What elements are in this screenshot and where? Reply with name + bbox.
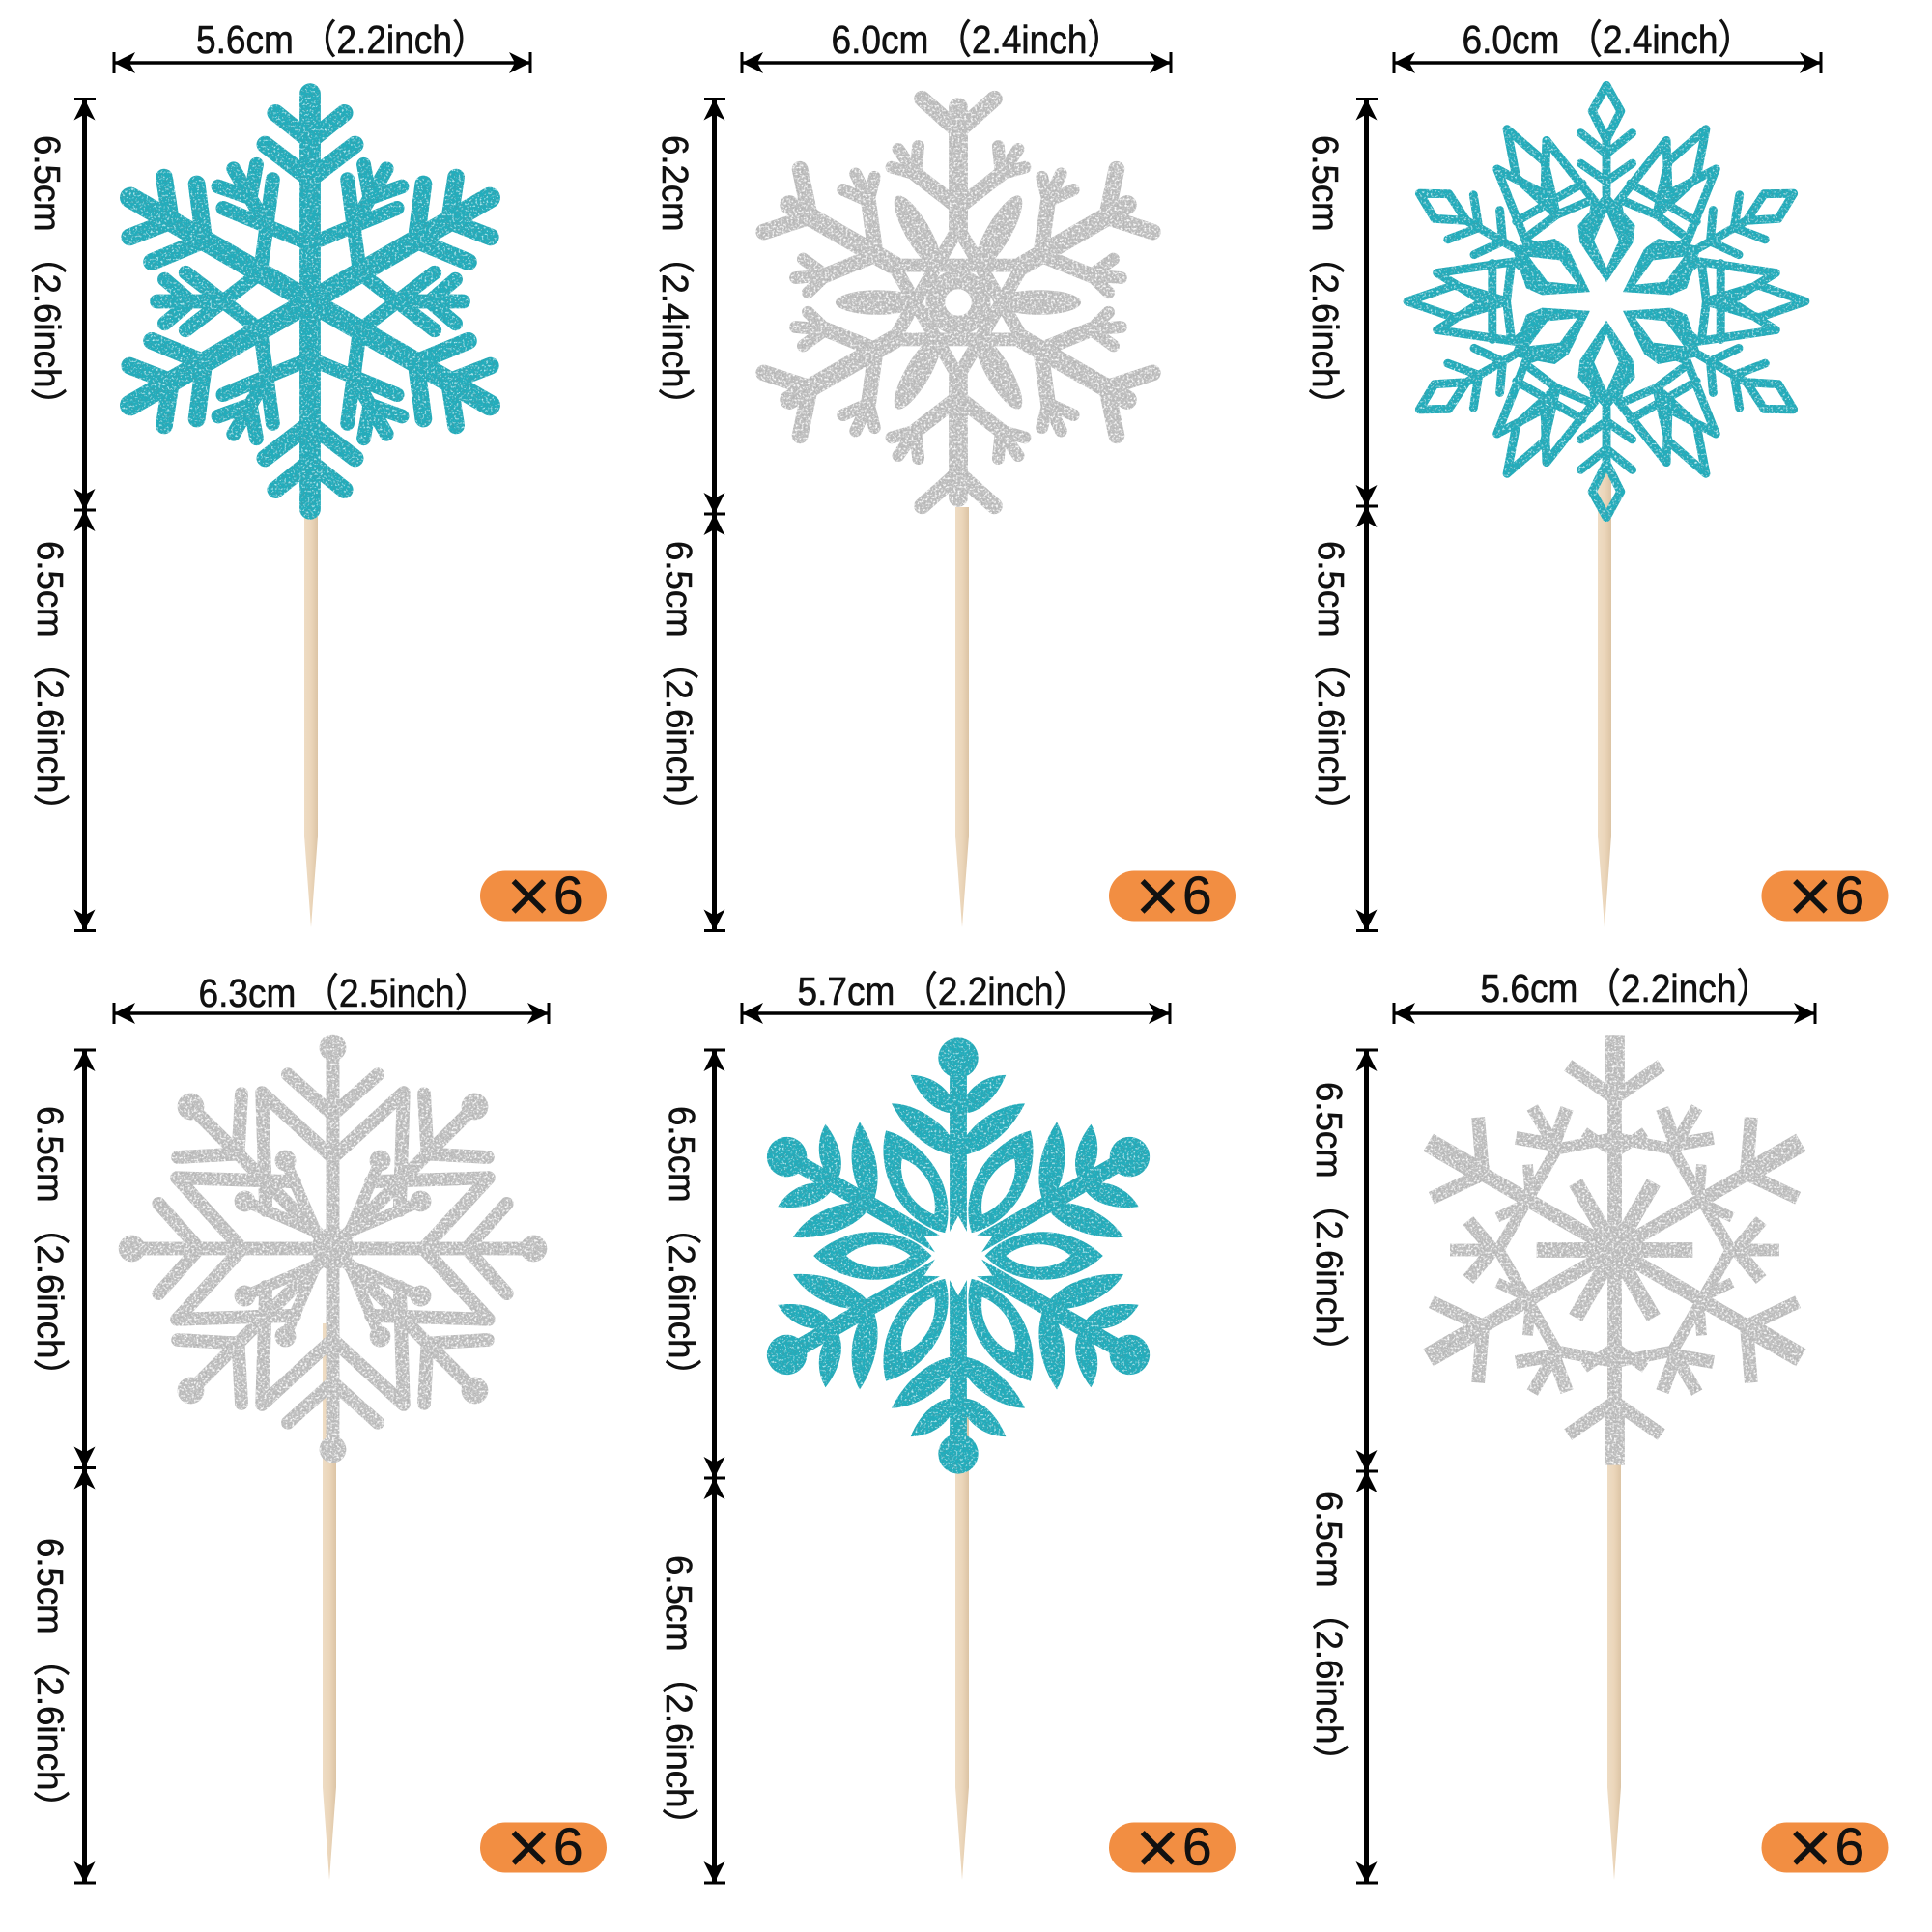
panel: teal snowflake topper 1: [26, 17, 607, 939]
snowflake: teal lattice: [1352, 77, 1861, 526]
quantity badge: 6: [554, 1816, 583, 1876]
quantity badge: ×: [1135, 852, 1180, 939]
quantity badge: 6: [1835, 1816, 1864, 1876]
snowflake: teal leaf: [724, 1037, 1193, 1474]
width arrow: [1394, 52, 1821, 73]
width label: 5.7cm （2.2inch）: [798, 969, 1090, 1013]
width arrow: [114, 1003, 549, 1024]
height arrows: [74, 99, 96, 931]
width label: 6.3cm （2.5inch）: [199, 971, 491, 1015]
width arrow: [114, 52, 530, 73]
snowflake height label: 6.5cm （2.6inch）: [661, 1106, 701, 1394]
stick height label: 6.5cm （2.6inch）: [1310, 541, 1350, 829]
panel: teal snowflake topper 5: [658, 969, 1236, 1889]
height arrows: [74, 1050, 96, 1883]
panel: teal snowflake topper 3: [1304, 17, 1888, 939]
width label: 6.0cm （2.4inch）: [1463, 17, 1754, 62]
stick height label: 6.5cm （2.6inch）: [658, 1555, 698, 1843]
stick height label: 6.5cm （2.6inch）: [29, 1538, 70, 1826]
snowflake: silver angular: [1375, 1035, 1855, 1465]
quantity badge: ×: [506, 852, 552, 939]
snowflake: silver ring centre: [746, 99, 1171, 506]
stick height label: 6.5cm （2.6inch）: [1308, 1492, 1349, 1779]
toothpick: [304, 512, 318, 927]
toothpick: [1607, 1338, 1621, 1880]
quantity badge: 6: [1835, 866, 1864, 925]
snowflake height label: 6.5cm （2.6inch）: [1304, 135, 1345, 423]
height arrows: [704, 99, 725, 931]
snowflake height label: 6.5cm （2.6inch）: [1308, 1082, 1349, 1370]
snowflake: teal rounded clover: [79, 94, 541, 509]
quantity badge: 6: [1182, 866, 1212, 925]
toothpick: [955, 1410, 969, 1880]
snowflake height label: 6.5cm （2.6inch）: [29, 1106, 70, 1394]
width label: 5.6cm （2.2inch）: [196, 17, 488, 62]
snowflake height label: 6.5cm （2.6inch）: [26, 135, 67, 423]
panel: silver snowflake topper 6: [1308, 966, 1888, 1889]
width arrow: [742, 52, 1171, 73]
snowflake: silver eight-arm: [119, 1035, 547, 1463]
panel: silver snowflake topper 2: [654, 17, 1236, 939]
quantity badge: ×: [1787, 1804, 1833, 1889]
quantity badge: ×: [1135, 1804, 1180, 1889]
quantity badge: ×: [506, 1804, 552, 1889]
quantity badge: 6: [554, 866, 583, 925]
toothpick: [1598, 473, 1611, 927]
quantity badge: [1109, 852, 1236, 939]
toothpick: [323, 1323, 336, 1880]
height arrows: [1356, 1050, 1378, 1883]
height arrows: [704, 1050, 725, 1883]
stick height label: 6.5cm （2.6inch）: [29, 541, 70, 829]
width arrow: [1394, 1003, 1815, 1024]
quantity badge: [480, 1804, 607, 1889]
quantity badge: ×: [1787, 852, 1833, 939]
stick height label: 6.5cm （2.6inch）: [658, 541, 698, 829]
panel: silver snowflake topper 4: [29, 971, 607, 1889]
height arrows: [1356, 99, 1378, 931]
toothpick: [955, 507, 969, 927]
quantity badge: [1762, 852, 1888, 939]
width arrow: [742, 1003, 1170, 1024]
snowflake height label: 6.2cm （2.4inch）: [654, 135, 695, 423]
quantity badge: [1109, 1804, 1236, 1889]
quantity badge: [480, 852, 607, 939]
quantity badge: [1762, 1804, 1888, 1889]
quantity badge: 6: [1182, 1816, 1212, 1876]
width label: 6.0cm （2.4inch）: [831, 17, 1122, 62]
width label: 5.6cm （2.2inch）: [1480, 966, 1772, 1010]
